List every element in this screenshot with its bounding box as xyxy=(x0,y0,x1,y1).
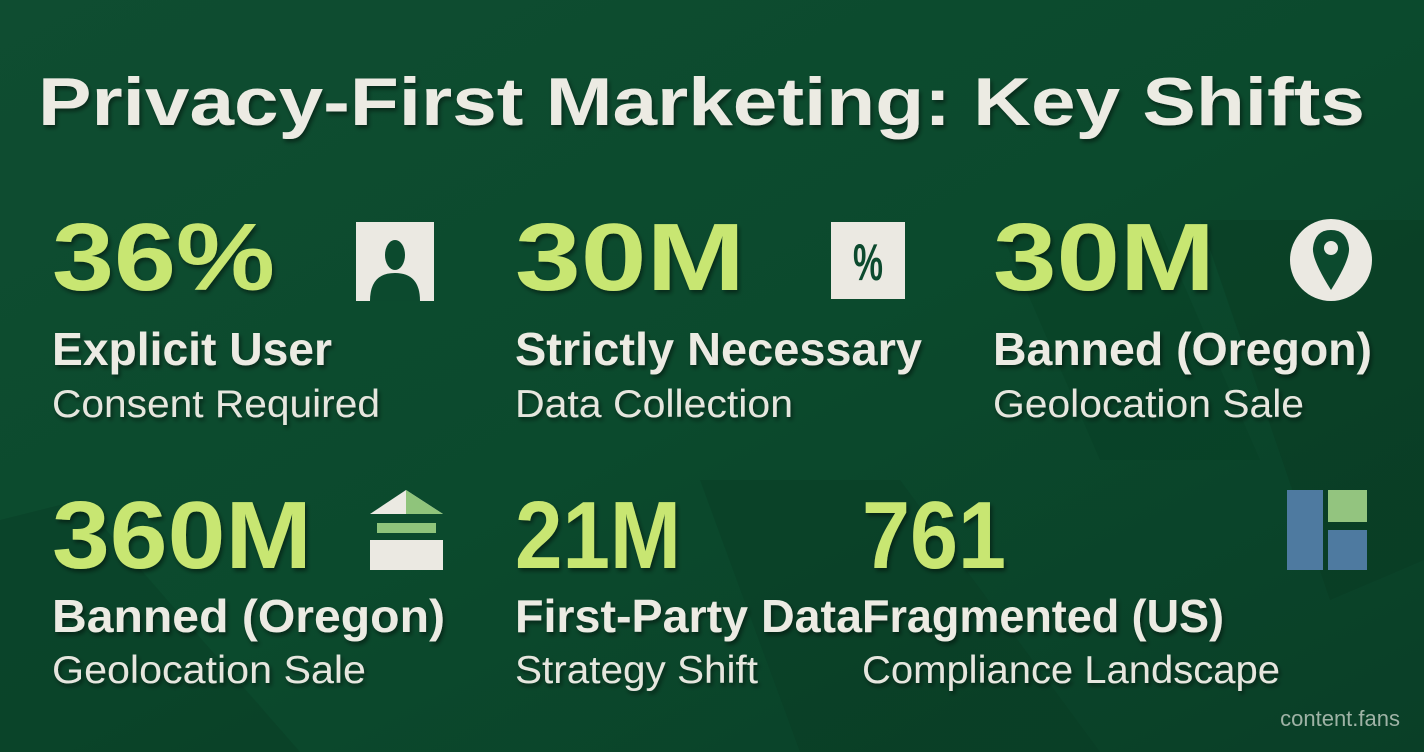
stat: 36% xyxy=(52,204,380,426)
stat: 761: 761 xyxy=(862,482,1006,589)
stat: 21M: 21M xyxy=(515,482,681,589)
icon: location pin xyxy=(1290,219,1372,301)
stat: 21M: First-Party Data xyxy=(515,590,862,642)
stat: 761: Fragmented (US) xyxy=(862,590,1224,642)
stat: 360M: Geolocation Sale xyxy=(52,649,366,692)
stat: 360M: Banned (Oregon) xyxy=(52,590,445,642)
stat: 360M xyxy=(52,482,445,692)
stat: 36%: Consent Required xyxy=(52,383,380,426)
stat: 30M banned oregon: 30M xyxy=(993,204,1215,311)
watermark: content.fans xyxy=(1280,706,1400,731)
icon: user xyxy=(356,222,434,301)
stat: 30M banned oregon xyxy=(993,204,1372,426)
stat: 30M banned oregon: Banned (Oregon) xyxy=(993,323,1372,375)
stat: 21M xyxy=(515,482,862,692)
stat: 21M: Strategy Shift xyxy=(515,649,758,692)
stat: 761: Compliance Landscape xyxy=(862,649,1280,692)
stat: 30M strictly necessary: Strictly Necessary xyxy=(515,323,922,375)
icon: percent: % xyxy=(853,234,883,292)
stat: 30M strictly necessary: 30M xyxy=(515,204,745,311)
stat: 30M banned oregon: Geolocation Sale xyxy=(993,383,1304,426)
title: Privacy-First Marketing: Key Shifts xyxy=(38,64,1365,140)
stat: 36%: 36% xyxy=(52,204,275,311)
stat: 360M: 360M xyxy=(52,482,312,589)
stat: 30M strictly necessary: Data Collection xyxy=(515,383,793,426)
icon: percent xyxy=(831,222,905,299)
stat: 36%: Explicit User xyxy=(52,323,332,375)
icon: layout blocks xyxy=(1287,490,1367,570)
icon: upload stack xyxy=(370,490,443,570)
stat: 761 xyxy=(862,482,1280,692)
stat: 30M strictly necessary xyxy=(515,204,922,426)
